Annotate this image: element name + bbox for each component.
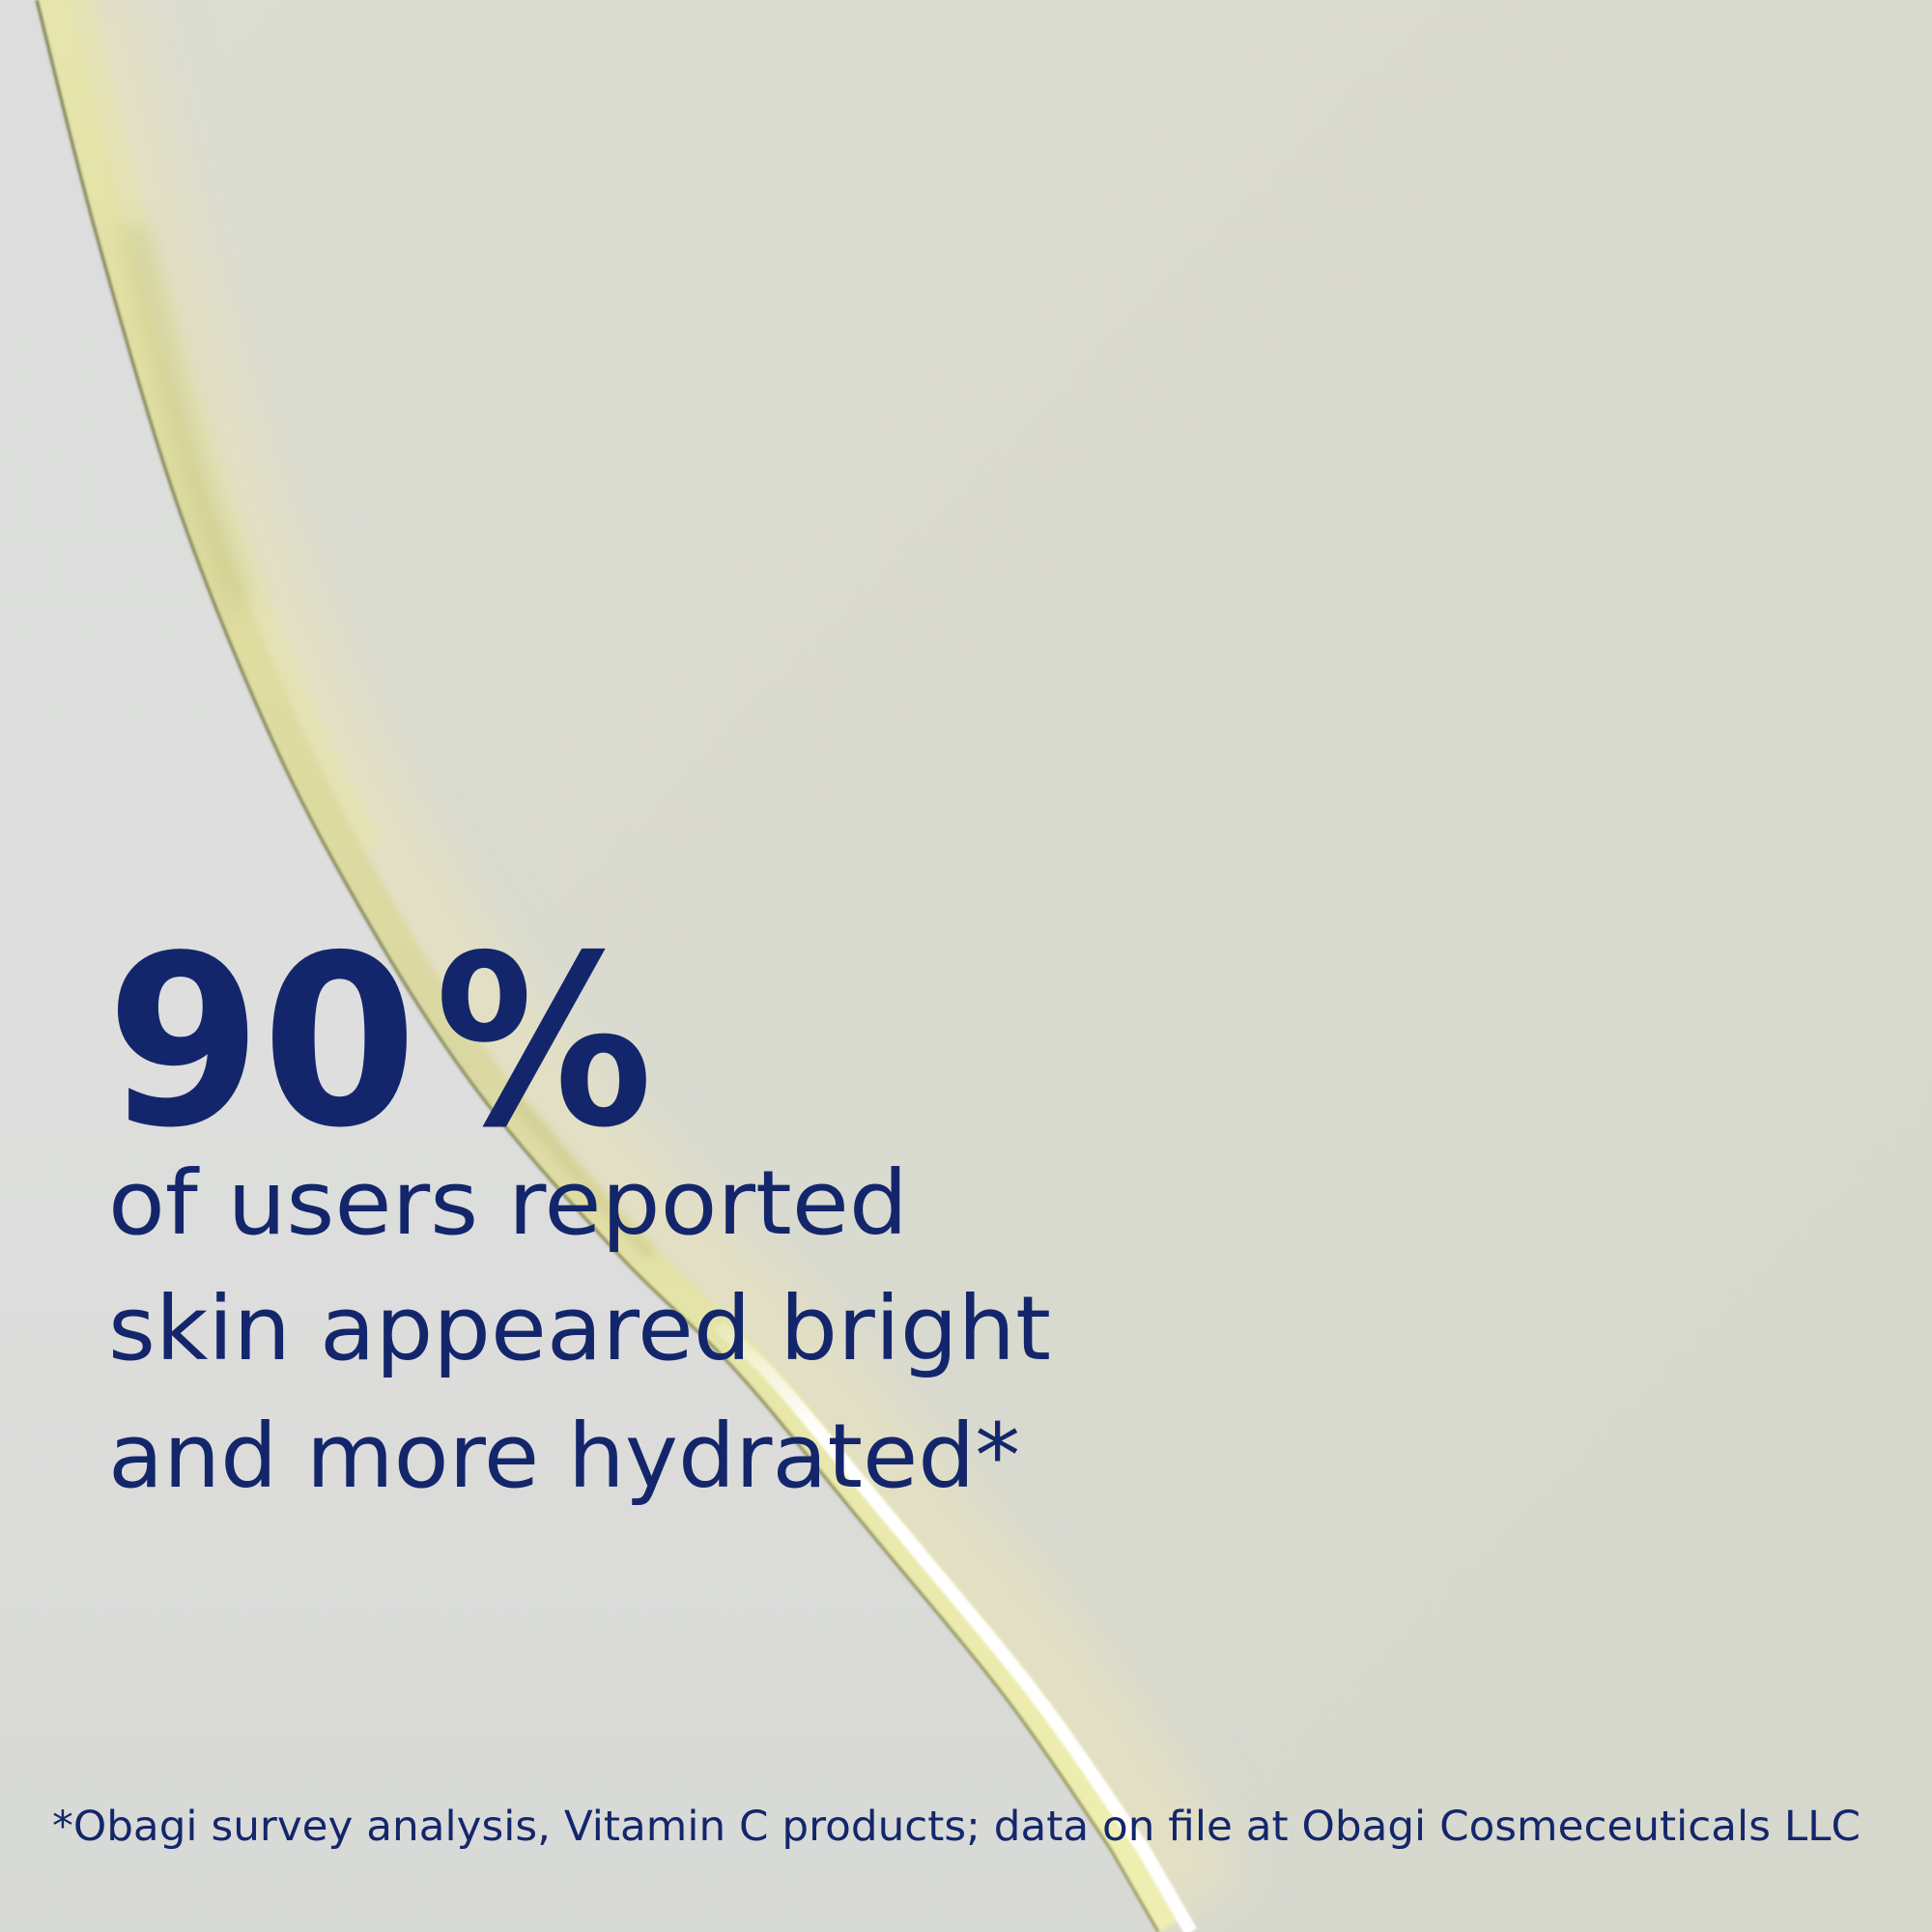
stat: 90%: [106, 905, 653, 1179]
statement text: [108, 1151, 1051, 1508]
percent sign: %: [435, 905, 653, 1179]
wide upper yellow haze: [37, 0, 338, 869]
soft cream glow along edge: [37, 0, 1158, 1932]
line 2: skin appeared bright: [108, 1277, 1051, 1380]
olive shadow streak, upper: [133, 225, 242, 604]
dark edge line: [37, 0, 1158, 1932]
inner bands clipped to the oil: [37, 0, 1191, 1932]
yellow inner band: [37, 0, 1158, 1932]
line 3: and more hydrated*: [108, 1405, 1020, 1508]
digits 90: 90: [106, 905, 417, 1179]
white highlight: [720, 1325, 1191, 1932]
olive shadow streak, middle: [516, 1099, 652, 1256]
footnote: *Obagi survey analysis, Vitamin C products; data on file at Obagi Cosmeceuticals LLC: [52, 1803, 1861, 1851]
line 1: of users reported: [108, 1151, 908, 1255]
